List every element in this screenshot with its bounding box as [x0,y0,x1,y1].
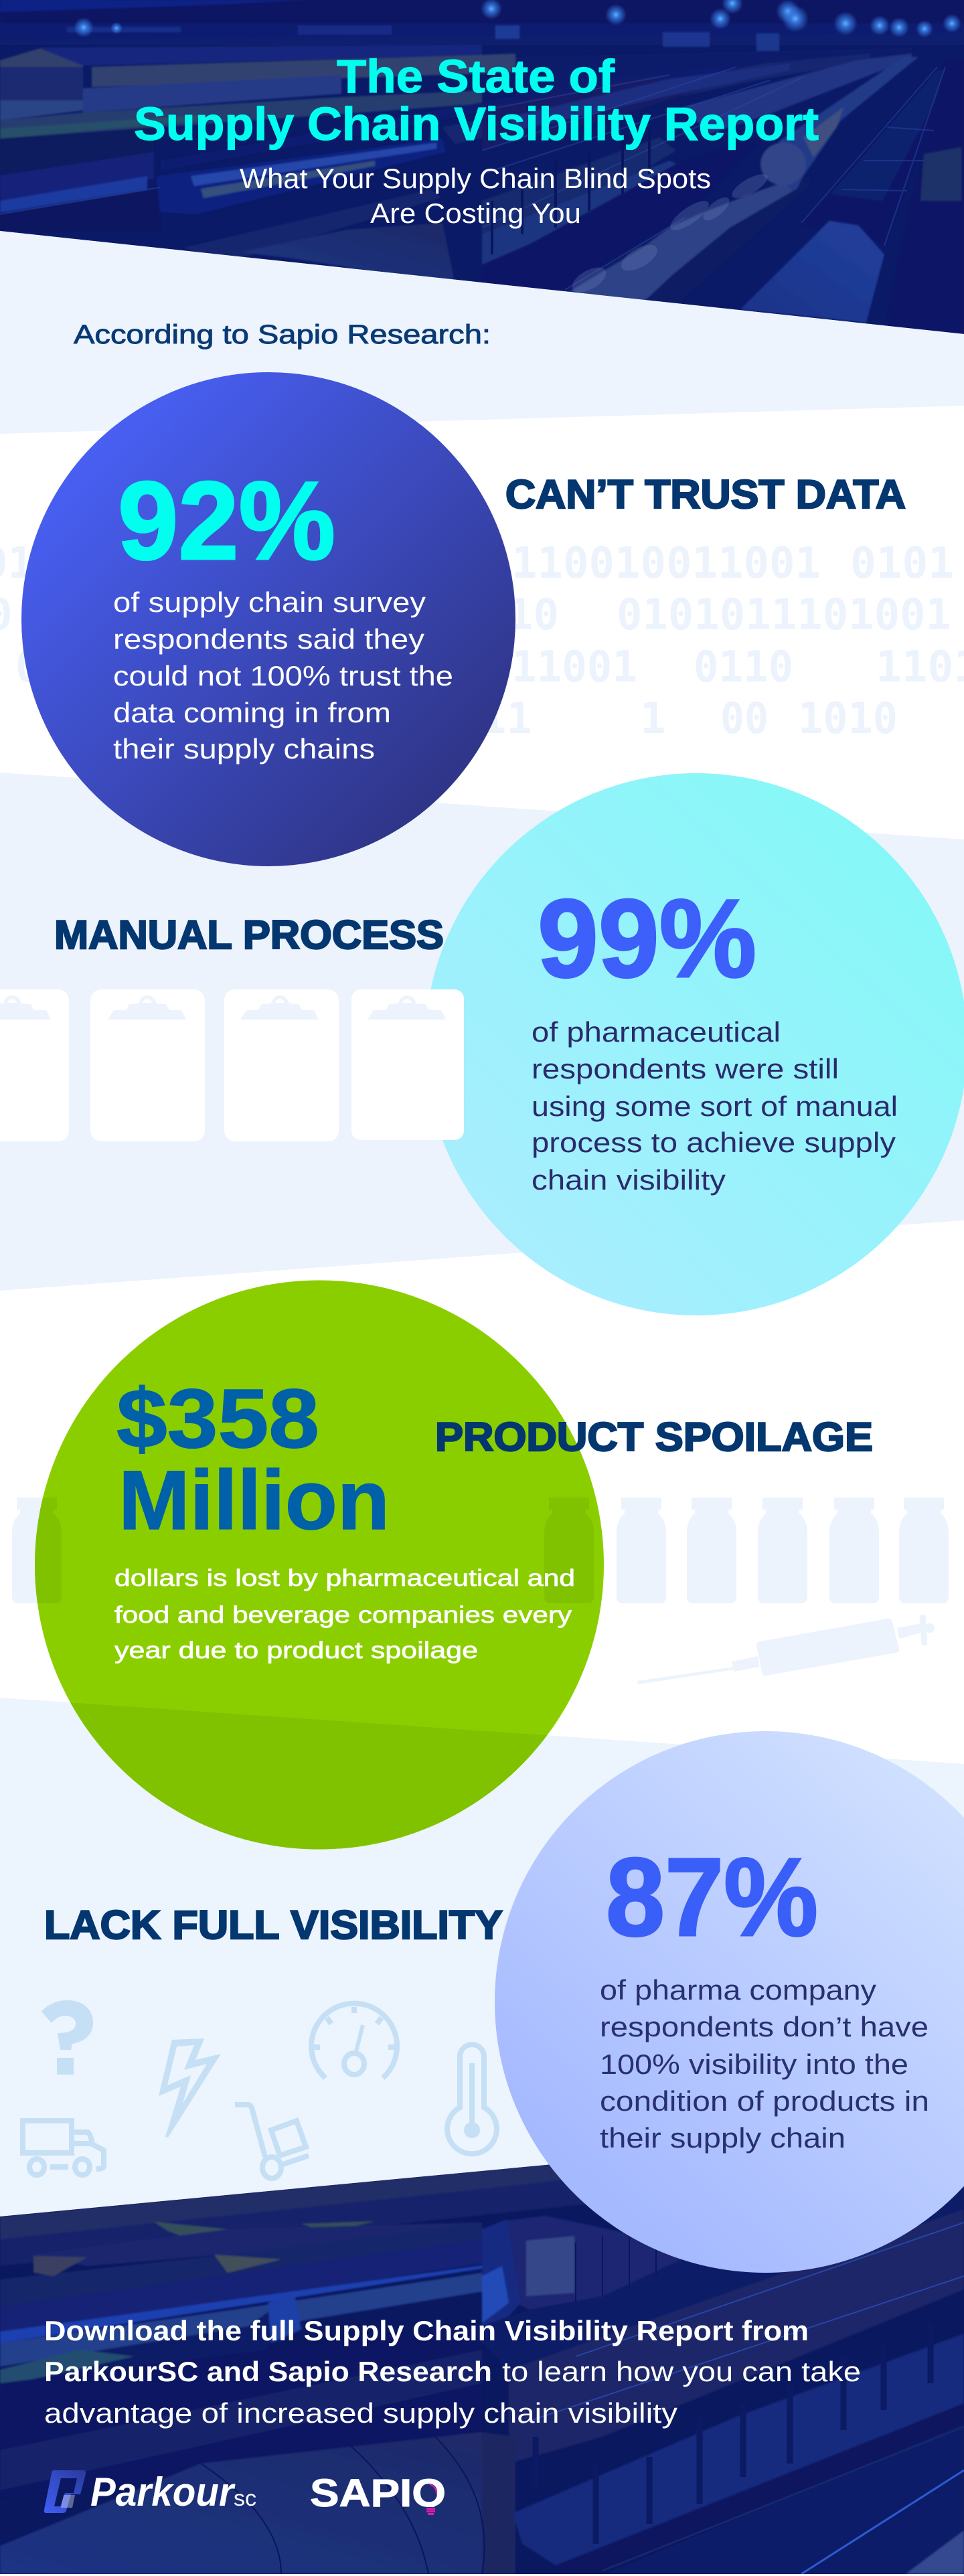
text: $358 million description [114,1565,575,1664]
header photo: rail yard at night [0,0,964,341]
call to action text: to learn how you can take [502,2356,861,2387]
title: Supply Chain Visibility Report [134,98,819,150]
text: $358 million description: food and beverage companies every [114,1602,572,1628]
call to action text: Download the full Supply Chain Visibility Report from [44,2315,809,2346]
binary digits background: 0101011101001 [617,590,951,640]
wordmark: Parkour sc: Parkour [90,2470,236,2514]
panel: manual process band [0,773,964,1291]
panel: 87% circle [495,1731,964,2273]
heading: product spoilage: PRODUCT SPOILAGE [435,1415,873,1459]
icons: vials [12,1498,949,1603]
source line: According to Sapio Research: [74,320,491,349]
panel: $358 million circle [35,1280,604,1849]
text: 87% description: condition of products in [600,2085,929,2117]
icons: clipboards [0,989,464,1141]
title [134,50,819,150]
binary digits background: 0110 [694,643,793,692]
binary digits background: 110010011001 [511,539,821,588]
heading: manual process: MANUAL PROCESS [54,912,444,957]
text: $358 million description: dollars is lost by pharmaceutical and [114,1565,575,1591]
text: 92% description: their supply chains [113,733,375,764]
icon: Parkour mark [44,2470,86,2513]
icon: lightning bolt [159,2038,221,2138]
logo: Sapio: SAPIO [310,2472,446,2515]
title: The State of [337,50,615,102]
panel: lower light band [0,1698,964,2217]
text: 99% description: chain visibility [532,1164,726,1196]
text: $358 million description: year due to product spoilage [114,1637,478,1664]
icon: delivery truck [23,2121,104,2175]
binary digits background: 10 [507,590,559,640]
circle: 99% background [425,773,964,1315]
text: 87% description: their supply chain [600,2122,846,2154]
subtitle: Are Costing You [370,197,581,229]
text: 92% description [113,586,453,764]
text: 87% description: respondents don’t have [600,2011,929,2042]
circle: $358 million background [35,1280,604,1849]
text: 92% description: respondents said they [113,623,424,655]
circle: 92% background [21,372,515,866]
text: 99% description: respondents were still [532,1053,839,1084]
text: 87% description [600,1974,929,2154]
binary digits background: 00 [720,694,769,744]
stat: 99%: 99% [538,877,756,1001]
circle: 87% background [495,1731,964,2273]
text: 92% description: of supply chain survey [113,586,426,618]
heading: can't trust data: CAN’T TRUST DATA [505,472,906,517]
call to action text: advantage of increased supply chain visibility [44,2397,677,2429]
panel: 92% circle [21,372,515,866]
stat: $358 million: $358 [116,1372,319,1465]
logo: ParkourSC: sc [234,2486,256,2510]
text: 99% description: process to achieve supply [532,1127,896,1158]
binary digits background [0,539,964,744]
text: 99% description: of pharmaceutical [532,1016,781,1048]
binary digits background: 1010 [798,694,898,744]
logo: ParkourSC [44,2470,256,2514]
icon: thermometer [447,2044,497,2154]
icon: question mark [42,2000,93,2075]
binary digits background: 0 [15,643,42,692]
text: 99% description: using some sort of manual [532,1091,898,1122]
panel: 99% circle [425,773,964,1315]
binary digits background: 1 [640,694,666,744]
subtitle: What Your Supply Chain Blind Spots [240,163,711,194]
text: 92% description: could not 100% trust the [113,660,453,692]
panel: top light band [0,231,964,434]
heading: lack full visibility: LACK FULL VISIBILITY [44,1903,503,1947]
text: 87% description: 100% visibility into the [600,2048,908,2080]
text: 87% description: of pharma company [600,1974,876,2006]
shaded overlap of circle [35,1498,594,1849]
icon: hand truck [235,2105,309,2178]
icon: syringe [637,1615,935,1684]
binary digits background: 0101 [850,539,954,588]
icon: gauge [311,2004,397,2078]
call to action text [44,2315,861,2429]
text: 92% description: data coming in from [113,697,391,728]
stat: 92%: 92% [118,459,335,583]
call to action text: ParkourSC and Sapio Research [44,2356,492,2387]
subtitle [240,163,711,229]
stat: $358 million: Million [118,1454,390,1547]
text: 99% description [532,1016,898,1196]
stat: $358 million [116,1372,390,1547]
stat: 87%: 87% [606,1836,818,1959]
footer photo: rail yard [0,2122,964,2576]
binary digits background: 11001 [511,643,637,692]
binary digits background: 11 [481,694,532,744]
